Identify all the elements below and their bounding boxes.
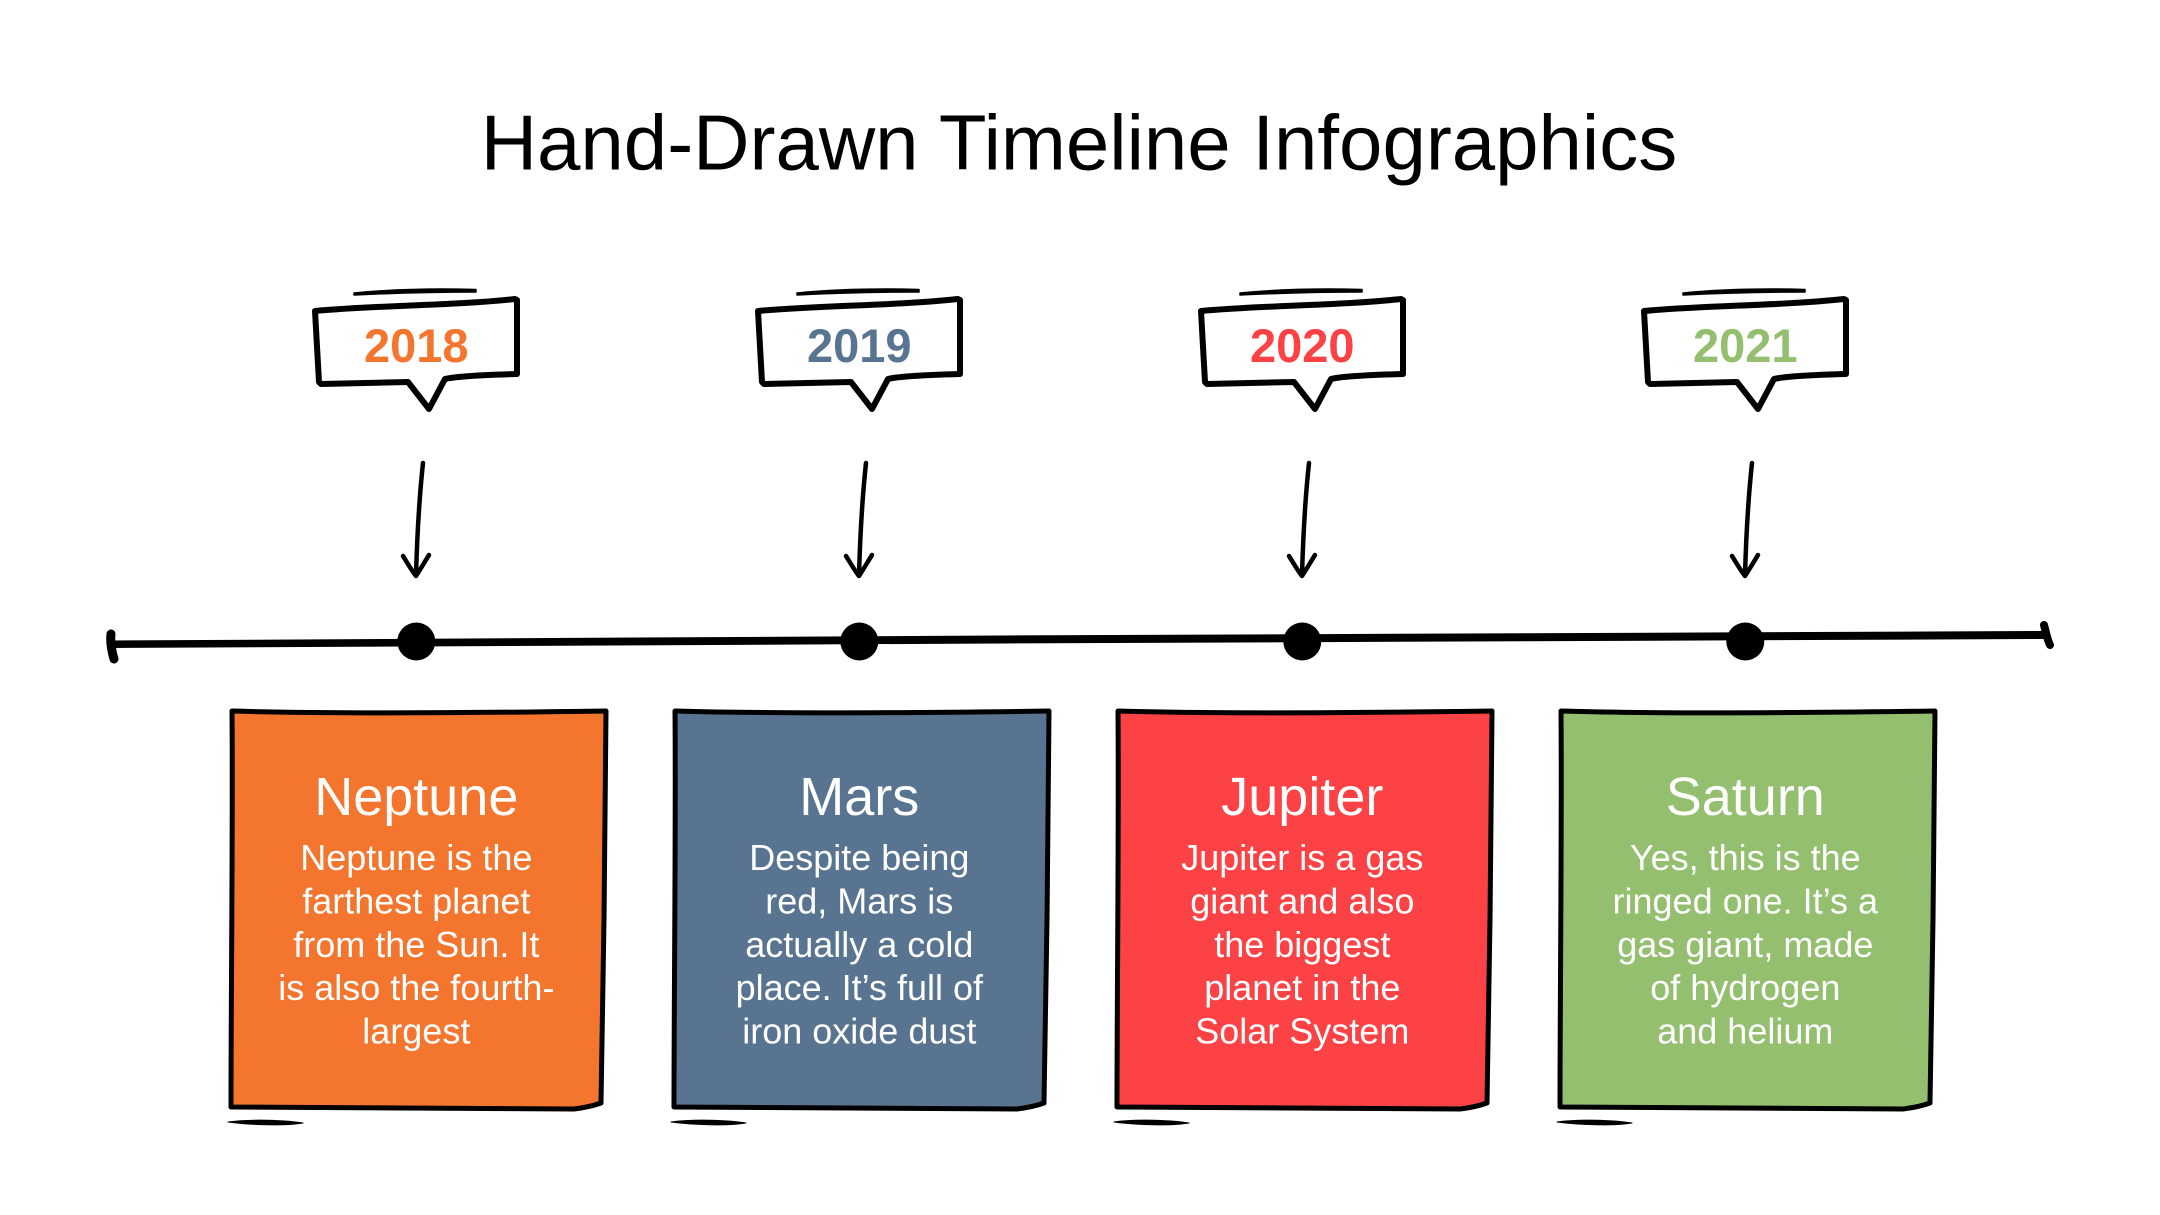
card: Jupiter: planet in the	[1204, 967, 1400, 1008]
card: Saturn: gas giant, made	[1617, 924, 1873, 965]
speech bubble 2021	[1644, 289, 1846, 409]
card: Jupiter	[1114, 711, 1492, 1125]
arrow 2019	[846, 463, 872, 576]
card: Jupiter: Jupiter	[1221, 767, 1383, 827]
speech bubble 2020	[1201, 289, 1403, 409]
speech bubble 2021: 2021	[1693, 319, 1798, 372]
card: Mars	[671, 711, 1049, 1125]
card: Mars: Despite being	[749, 837, 969, 878]
timeline dot 2020	[1283, 622, 1321, 660]
card: Neptune: Neptune is the	[300, 837, 532, 878]
speech bubble 2018	[315, 289, 517, 409]
card: Neptune	[228, 711, 606, 1125]
card: Saturn	[1557, 711, 1935, 1125]
column: 2021 Saturn	[1557, 289, 1935, 1125]
card: Neptune: from the Sun. It	[293, 924, 539, 965]
card: Jupiter: giant and also	[1190, 880, 1414, 921]
card: Saturn: and helium	[1657, 1011, 1833, 1052]
speech bubble 2018: 2018	[364, 319, 469, 372]
title: Hand-Drawn Timeline Infographics	[481, 98, 1677, 186]
card: Neptune: farthest planet	[302, 880, 530, 921]
card: Mars: iron oxide dust	[742, 1011, 976, 1052]
card: Jupiter: Jupiter is a gas	[1181, 837, 1423, 878]
card: Neptune: Neptune	[314, 767, 518, 827]
timeline dot 2019	[840, 622, 878, 660]
timeline dot 2018	[397, 622, 435, 660]
card: Neptune: is also the fourth-	[278, 967, 554, 1008]
card: Saturn: Yes, this is the	[1630, 837, 1861, 878]
card: Mars: Mars	[799, 767, 919, 827]
card: Neptune: largest	[362, 1011, 470, 1052]
arrow 2021	[1732, 463, 1758, 576]
speech bubble 2019: 2019	[807, 319, 912, 372]
column: 2020 Jupiter	[1114, 289, 1492, 1125]
card: Jupiter: Solar System	[1195, 1011, 1409, 1052]
card: Saturn: Saturn	[1666, 767, 1825, 827]
speech bubble 2019	[758, 289, 960, 409]
timeline axis	[111, 625, 2050, 659]
timeline dot 2021	[1726, 622, 1764, 660]
card: Mars: red, Mars is	[765, 880, 953, 921]
card: Mars: actually a cold	[745, 924, 973, 965]
card: Jupiter: the biggest	[1214, 924, 1390, 965]
column: 2019 Mars	[671, 289, 1049, 1125]
speech bubble 2020: 2020	[1250, 319, 1355, 372]
arrow 2020	[1289, 463, 1315, 576]
card: Saturn: ringed one. It’s a	[1613, 880, 1879, 921]
column: 2018 Neptune	[228, 289, 606, 1125]
card: Saturn: of hydrogen	[1650, 967, 1840, 1008]
card: Mars: place. It’s full of	[736, 967, 984, 1008]
arrow 2018	[403, 463, 429, 576]
